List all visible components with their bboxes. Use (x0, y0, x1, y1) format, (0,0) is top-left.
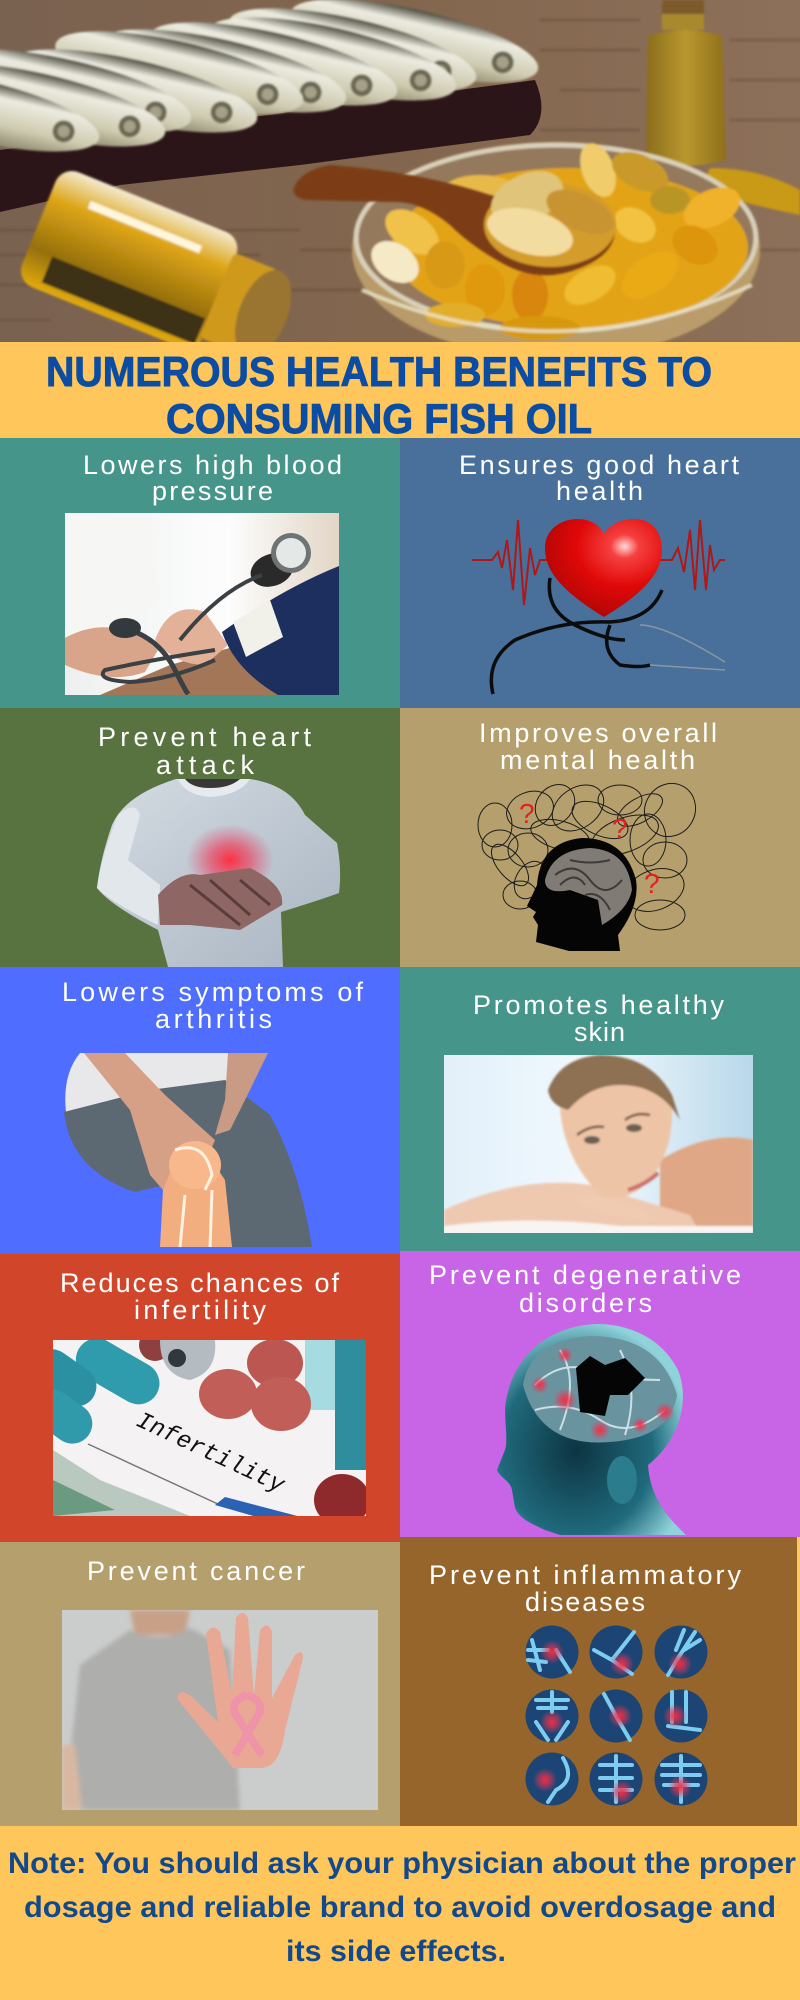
panel: lowers symptoms of arthritis (0, 967, 400, 1254)
heading: Prevent inflammatory (429, 1560, 742, 1590)
panel: prevent degenerative disorders (400, 1251, 800, 1537)
heading (60, 1268, 339, 1325)
panel: promotes healthy skin (400, 967, 800, 1251)
title: CONSUMING FISH OIL (166, 395, 592, 442)
heading: health (556, 476, 643, 506)
panel: reduces chances of infertility (0, 1254, 400, 1542)
photo: man clutching chest (97, 779, 340, 967)
photo: infertility pills and syringe (53, 1340, 366, 1516)
note (8, 1847, 796, 1968)
title: NUMEROUS HEALTH BENEFITS TO (46, 348, 712, 395)
heading: Promotes healthy (473, 990, 724, 1020)
heading: skin (574, 1017, 625, 1047)
dark wooden board (0, 80, 541, 212)
upright bottle (646, 0, 800, 215)
icon: head silhouette, brain and scribbles: ? (612, 813, 628, 844)
illustration: head with damaged brain (497, 1324, 686, 1535)
heading (459, 450, 739, 506)
note: Note: You should ask your physician about the proper (8, 1847, 796, 1880)
heading (62, 977, 363, 1034)
panel: prevent cancer (0, 1542, 400, 1826)
panel: lowers high blood pressure (0, 438, 400, 708)
icons: nine joint circles (526, 1626, 708, 1806)
photo: infertility pills and syringe: Infertility (132, 1408, 289, 1500)
heading: Ensures good heart (459, 450, 739, 480)
photo: blood pressure cuff (65, 513, 339, 696)
heading: disorders (519, 1288, 652, 1318)
heading: Improves overall (479, 718, 717, 748)
icon: head silhouette, brain and scribbles: ? (519, 798, 535, 829)
heading (429, 1560, 742, 1617)
heading: Prevent degenerative (429, 1260, 741, 1290)
photo: hand with pink ribbon (62, 1610, 378, 1810)
heading: Lowers high blood (83, 450, 342, 480)
icon: head silhouette, brain and scribbles: ? (644, 868, 660, 899)
photo: knee with arthritis (64, 1053, 312, 1247)
glass bottle lying down (20, 169, 292, 342)
icon: head silhouette, brain and scribbles (478, 774, 705, 951)
heading: Reduces chances of (60, 1268, 339, 1298)
panel: ensures good heart health (400, 438, 800, 708)
panel: prevent inflammatory diseases (400, 1537, 797, 1826)
title (46, 348, 712, 442)
heading (98, 722, 311, 780)
note: its side effects. (286, 1935, 506, 1968)
glass bowl (352, 138, 760, 358)
heading: arthritis (155, 1004, 272, 1034)
heading: mental health (500, 745, 695, 775)
heading: diseases (525, 1587, 645, 1617)
panel: improves overall mental health (400, 708, 800, 967)
heading (473, 990, 724, 1047)
heading (429, 1260, 741, 1318)
heading: attack (156, 750, 254, 780)
hero photo: fish, oil bottles and capsules (0, 0, 800, 342)
panel: prevent heart attack (0, 708, 400, 967)
heading (479, 718, 717, 775)
heading: Lowers symptoms of (62, 977, 363, 1007)
heading: pressure (152, 476, 273, 506)
heading: Prevent cancer (87, 1556, 305, 1586)
note: dosage and reliable brand to avoid overdosage and (24, 1891, 776, 1924)
icon: heart with ECG and stethoscope (472, 519, 725, 694)
heading (83, 450, 342, 506)
fish row (0, 0, 540, 153)
photo: woman with healthy skin (444, 1055, 753, 1233)
wooden spoon with capsules (293, 160, 620, 275)
heading: Prevent heart (98, 722, 311, 752)
heading: infertility (134, 1295, 266, 1325)
